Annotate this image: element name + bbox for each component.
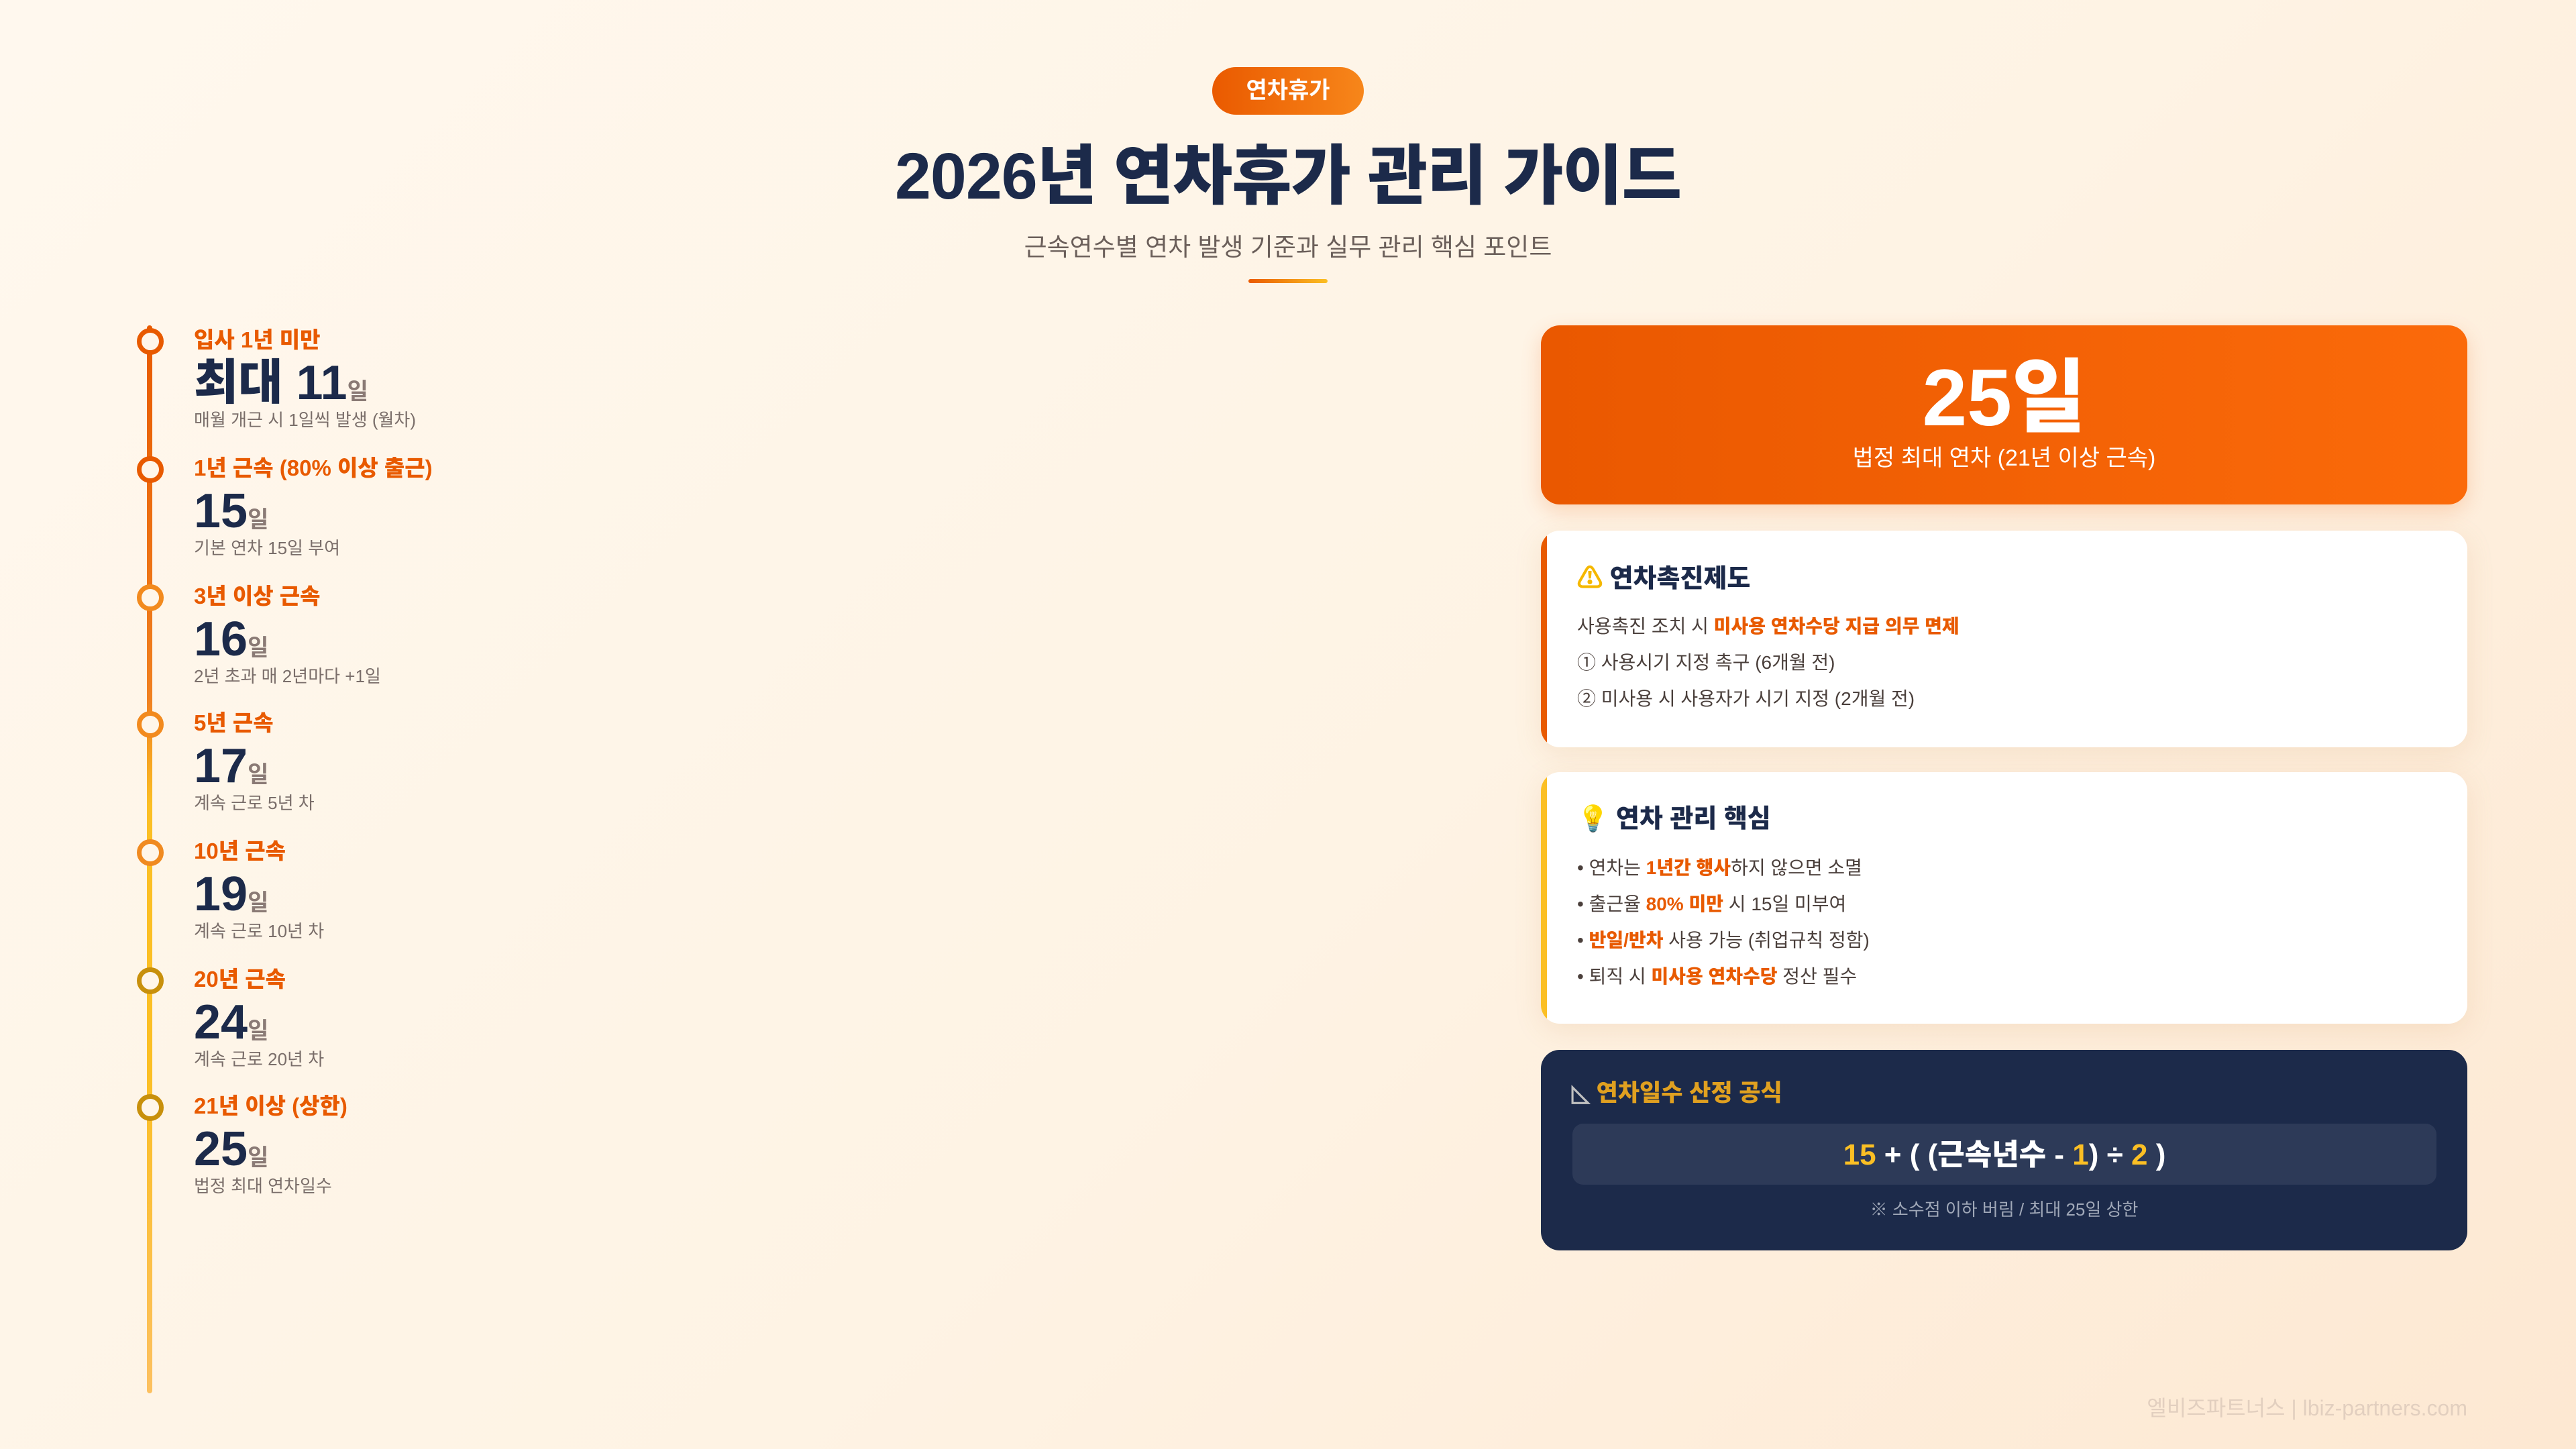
text: 10년 근속 xyxy=(194,839,286,863)
timeline item: 3 years xyxy=(137,584,381,686)
hero number: 25일 xyxy=(1923,353,2086,443)
timeline item: 5 years: 17일 xyxy=(194,739,268,793)
card: promotion system xyxy=(1541,531,2467,747)
timeline item: under 1 year: 최대 11일 xyxy=(194,356,368,410)
formula box xyxy=(1572,1124,2436,1185)
timeline item: under 1 year xyxy=(137,327,416,430)
timeline item: 21+ years: 25일 xyxy=(194,1122,268,1176)
card: promotion system: ① 사용시기 지정 촉구 (6개월 전) xyxy=(1577,652,1835,673)
card title with bulb icon: 💡 연차 관리 핵심 xyxy=(1577,805,1771,833)
card: promotion system: ② 미사용 시 사용자가 시기 지정 (2개월 전) xyxy=(1577,688,1915,709)
badge pill: 연차휴가 xyxy=(1246,78,1330,103)
text: 입사 1년 미만 xyxy=(194,327,321,352)
timeline item: 3 years: 16일 xyxy=(194,612,268,666)
hero card: 25 days xyxy=(1541,325,2467,504)
formula note: ※ 소수점 이하 버림 / 최대 25일 상한 xyxy=(1870,1199,2138,1220)
timeline item: 10 years xyxy=(137,839,324,941)
text: 3년 이상 근속 xyxy=(194,584,321,608)
text: 5년 근속 xyxy=(194,710,274,735)
timeline item: 21+ years: 법정 최대 연차일수 xyxy=(194,1176,332,1196)
timeline item: 21+ years xyxy=(137,1093,347,1196)
title: 2026년 연차휴가 관리 가이드 xyxy=(895,140,1681,213)
formula title: ◺ 연차일수 산정 공식 xyxy=(1572,1080,1782,1106)
footer: 엘비즈파트너스 | lbiz-partners.com xyxy=(2147,1396,2467,1420)
timeline item: 20 years: 계속 근로 20년 차 xyxy=(194,1049,324,1069)
timeline line xyxy=(147,325,152,1393)
timeline item: under 1 year: 매월 개근 시 1일씩 발생 (월차) xyxy=(194,410,416,430)
card: management key points: • 퇴직 시 미사용 연차수당 정산 필수 xyxy=(1577,966,1857,987)
timeline item: 5 years xyxy=(137,710,315,813)
text: 1년 근속 (80% 이상 출근) xyxy=(194,455,433,480)
bullets: • 연차는 1년간 행사하지 않으면 소멸 xyxy=(1577,857,1862,878)
timeline item: 1 year: 기본 연차 15일 부여 xyxy=(194,538,340,558)
text: 20년 근속 xyxy=(194,967,286,991)
badge pill xyxy=(1212,67,1364,115)
card: management key points xyxy=(1541,772,2467,1024)
timeline item: 3 years: 2년 초과 매 2년마다 +1일 xyxy=(194,666,381,686)
hero caption: 법정 최대 연차 (21년 이상 근속) xyxy=(1853,445,2155,471)
formula box: 15 + ( (근속년수 - 1) ÷ 2 ) xyxy=(1843,1138,2165,1171)
text: 21년 이상 (상한) xyxy=(194,1093,347,1118)
timeline item: 1 year: 15일 xyxy=(194,484,268,538)
timeline item: 10 years: 19일 xyxy=(194,867,268,921)
card lines: 사용촉진 조치 시 미사용 연차수당 지급 의무 면제 xyxy=(1577,616,1960,637)
card: management key points: • 출근율 80% 미만 시 15일 미부여 xyxy=(1577,894,1846,914)
timeline item: 5 years: 계속 근로 5년 차 xyxy=(194,793,315,813)
timeline item: 20 years xyxy=(137,967,324,1069)
timeline item: 10 years: 계속 근로 10년 차 xyxy=(194,921,324,941)
timeline item: 20 years: 24일 xyxy=(194,996,268,1049)
card: management key points: • 반일/반차 사용 가능 (취업규칙 정함) xyxy=(1577,930,1870,951)
card title with warning icon: ⚠ 연차촉진제도 xyxy=(1577,565,1750,593)
subtitle: 근속연수별 연차 발생 기준과 실무 관리 핵심 포인트 xyxy=(1024,233,1552,261)
card: formula xyxy=(1541,1050,2467,1250)
timeline item: 1 year xyxy=(137,455,433,558)
